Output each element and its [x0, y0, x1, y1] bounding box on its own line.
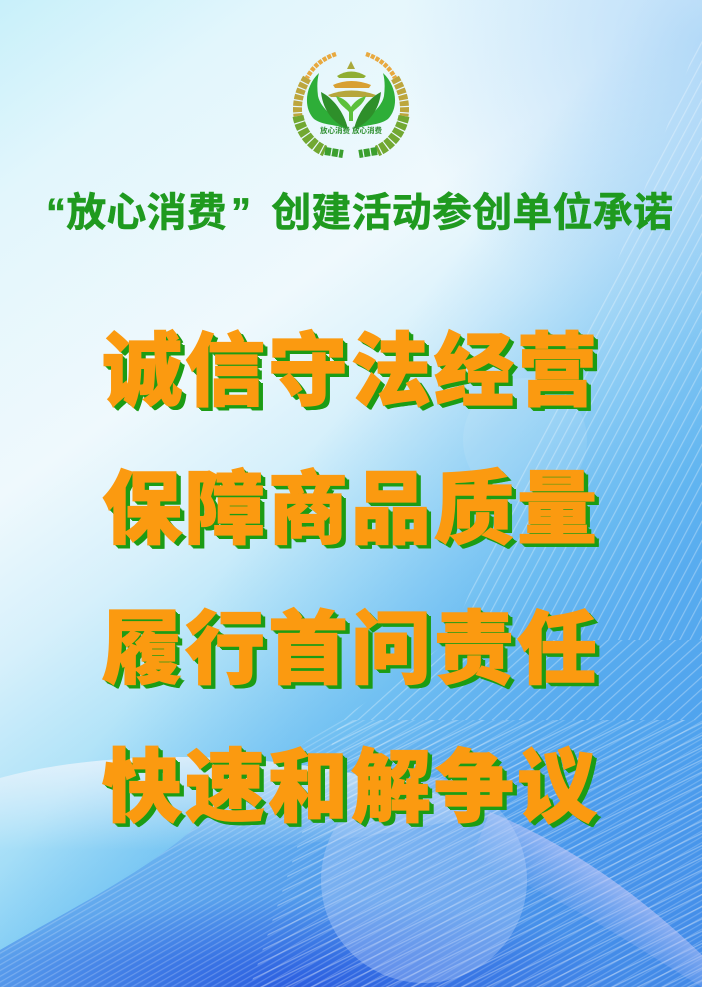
icon: green wheat and hands logo	[292, 52, 410, 158]
icon: temple of heaven	[328, 61, 376, 97]
slogan line 1: 诚信守法经营	[102, 327, 600, 416]
icon: right wheat wreath	[359, 54, 405, 154]
icon: green hands and sprout	[307, 73, 395, 130]
icon: left wheat wreath	[297, 54, 343, 154]
heading: pledge title: “放心消费” 创建活动参创单位承诺	[46, 191, 673, 235]
slogan line 3: 履行首问责任	[102, 605, 600, 694]
icon: logo caption text: 放心消费 放心消费	[320, 125, 383, 135]
slogan line 4: 快速和解争议	[102, 743, 600, 832]
slogan line 2: 保障商品质量	[102, 465, 600, 554]
